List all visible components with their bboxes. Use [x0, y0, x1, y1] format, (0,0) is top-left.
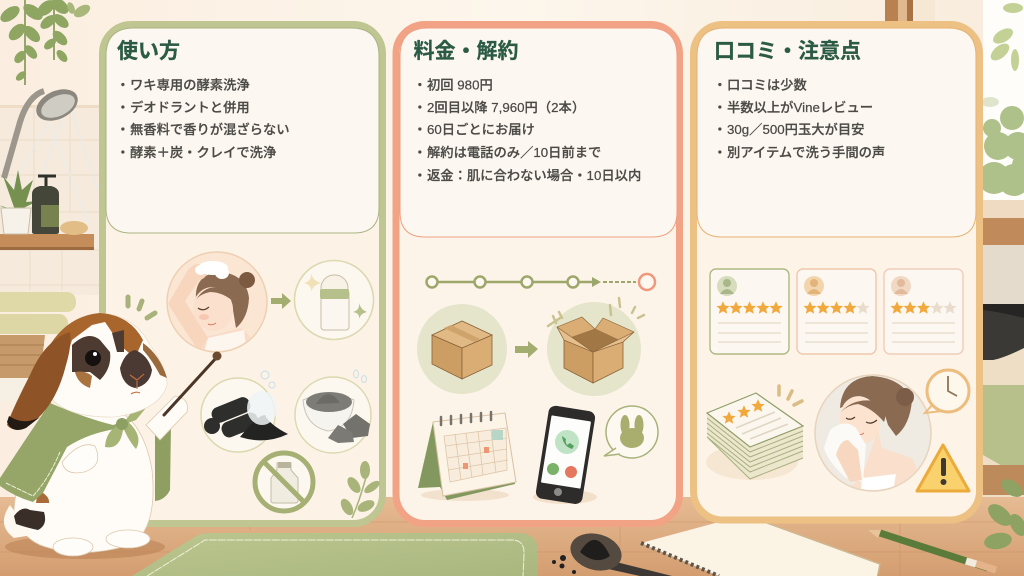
- bullet list: ・: [413, 122, 427, 137]
- front paw: [62, 445, 98, 473]
- cape back flap: [155, 425, 171, 501]
- bow: [105, 408, 146, 449]
- bullet list: [413, 78, 641, 183]
- bullet list: [116, 76, 290, 160]
- droopy ear: [7, 332, 70, 429]
- icon: smartphone: [533, 405, 597, 505]
- bullet list: ・: [116, 100, 130, 115]
- eye: [85, 350, 101, 366]
- window at top right: [885, 0, 1024, 350]
- cheek spot: [75, 372, 92, 388]
- desk mat: [132, 533, 538, 576]
- notebook: [641, 515, 880, 576]
- bullet list: ・: [413, 168, 427, 183]
- bullet list: ・: [116, 78, 130, 92]
- eye highlight: [93, 352, 97, 356]
- bullet list: 初回 980円: [427, 78, 493, 92]
- pencil: [868, 530, 996, 570]
- bullet list: 返金：肌に合わない場合・10日以内: [427, 167, 641, 183]
- head: [46, 313, 167, 417]
- icon: clay bowl: [295, 370, 371, 453]
- bullet list: デオドラントと併用: [130, 99, 250, 115]
- bullet list: ワキ専用の酵素洗浄: [130, 76, 250, 92]
- icon: speech bubble with rabbit: [604, 406, 658, 458]
- side fur: [143, 343, 167, 378]
- arrow: [515, 341, 538, 358]
- bullet list: ・: [713, 122, 727, 137]
- eye patch: [72, 336, 110, 380]
- brown cap: [50, 313, 143, 370]
- text box: [400, 28, 677, 237]
- bullet list: 解約は電話のみ／10日前まで: [427, 144, 601, 160]
- towels, basket and counter: [0, 292, 76, 402]
- bullet list: ・: [116, 145, 130, 160]
- bullet list: 半数以上がVineレビュー: [727, 99, 873, 115]
- rabbit body: [14, 405, 153, 552]
- dark stripe: [112, 330, 124, 352]
- bullet list: ・: [413, 100, 427, 115]
- nose patch: [120, 350, 152, 388]
- hanging plant: [0, 0, 92, 85]
- heading: 料金・解約: [414, 40, 518, 63]
- icon: emphasis ticks: [128, 297, 155, 318]
- icon: desk calendar: [418, 412, 516, 501]
- icon: clock bubble: [925, 370, 969, 413]
- bullet list: ・: [713, 100, 727, 115]
- text box: [697, 28, 976, 237]
- icon: warning triangle: [917, 445, 969, 491]
- raised arm: [146, 396, 188, 440]
- bullet list: 酵素＋炭・クレイで洗浄: [130, 144, 276, 160]
- icon: woman washing: [167, 252, 267, 356]
- panel frame: [694, 24, 980, 520]
- icon: charcoal: [201, 371, 288, 452]
- bullet list: ・: [413, 78, 427, 92]
- icon: roll-on deodorant: [294, 260, 374, 340]
- shower head: [4, 83, 98, 225]
- bullet list: 60日ごとにお届け: [427, 121, 535, 137]
- panel frame: [102, 24, 382, 524]
- panel: 使い方: [102, 24, 382, 524]
- review card: 3 stars: [884, 269, 963, 354]
- ear tip: [7, 416, 40, 430]
- bullet list: 口コミは少数: [727, 78, 807, 92]
- heading: 使い方: [117, 40, 180, 63]
- review card: 4 stars: [797, 269, 876, 354]
- heading: 口コミ・注意点: [714, 40, 861, 63]
- charcoal spoon: [552, 528, 672, 576]
- icon: open box: [547, 298, 644, 396]
- icon: woman with towel: [815, 375, 931, 497]
- right side: bowl, towel, leaves: [983, 304, 1024, 551]
- nose and mouth: [130, 374, 144, 394]
- review card: 5 stars: [710, 269, 789, 354]
- bullet list: 別アイテムで洗う手間の声: [727, 144, 885, 160]
- icon: no fragrance: [255, 453, 313, 511]
- bullet list: ・: [116, 122, 130, 137]
- shelf with plant, bottle and soap: [0, 170, 94, 250]
- bullet list: 無香料で香りが混ざらない: [130, 121, 290, 137]
- cape: [0, 403, 135, 502]
- arrow: [271, 293, 291, 309]
- bullet list: [713, 78, 885, 160]
- icon: closed box: [417, 304, 507, 394]
- panel: 料金・解約: [396, 24, 680, 524]
- pointer: [164, 352, 222, 415]
- bullet list: 30g／500円玉大が目安: [727, 121, 864, 137]
- character: rabbit with cape and pointer: [0, 297, 222, 559]
- icon: sprig: [338, 461, 382, 518]
- icon: stack of reviews: [706, 386, 803, 480]
- delivery timeline: [426, 274, 655, 290]
- bullet list: ・: [713, 78, 727, 92]
- text box: [106, 28, 379, 233]
- bullet list: ・: [713, 145, 727, 160]
- bullet list: 2回目以降 7,960円（2本）: [427, 99, 585, 115]
- bullet list: ・: [413, 145, 427, 160]
- panel frame: [396, 24, 680, 524]
- panel: 口コミ・注意点: [694, 24, 980, 520]
